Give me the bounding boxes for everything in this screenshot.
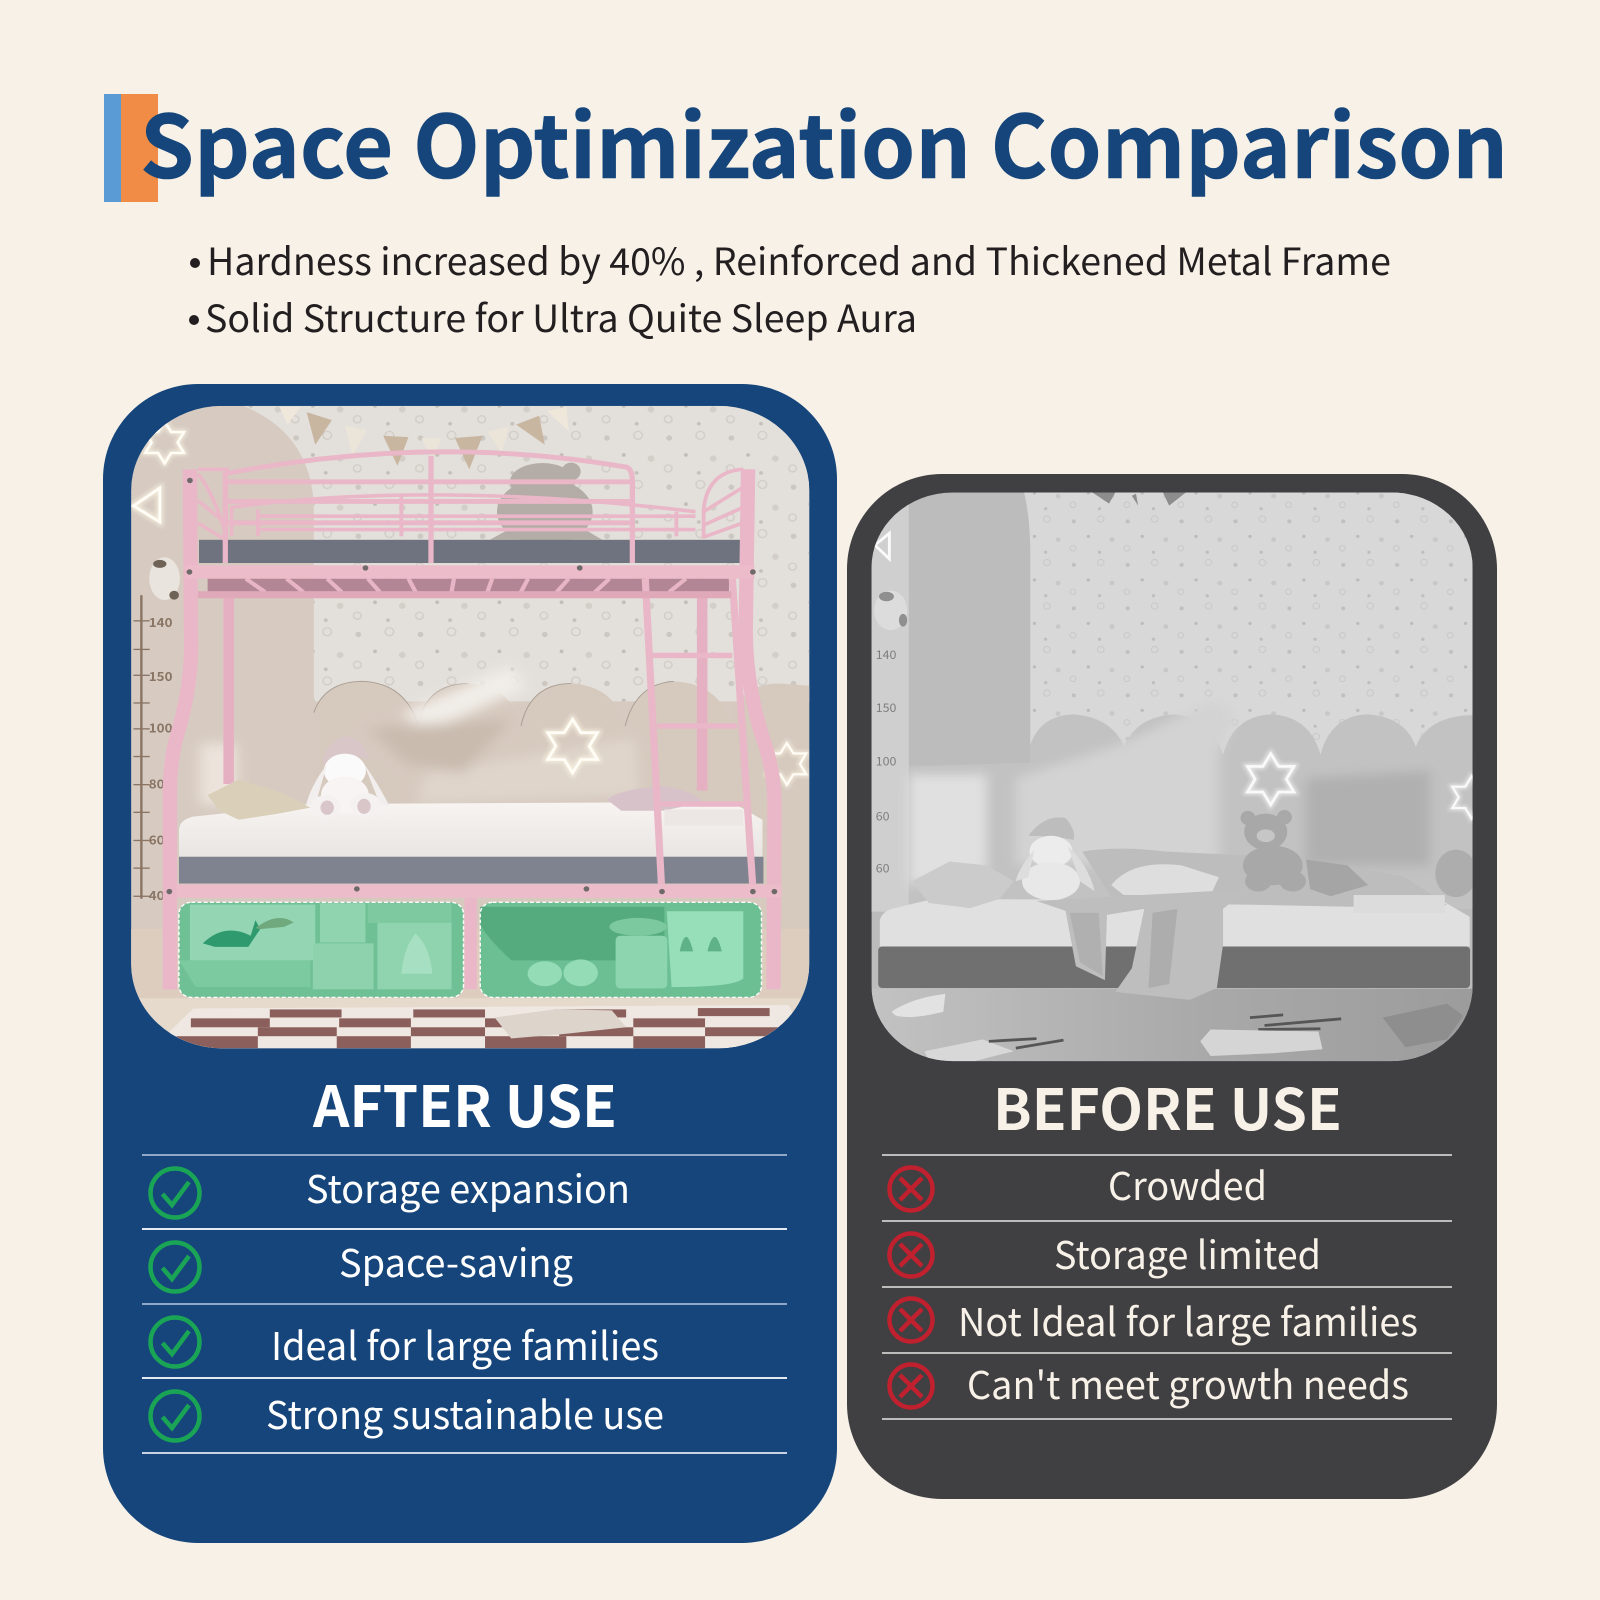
icon: orange accent bar: [121, 94, 158, 202]
pillows and rumpled bedding: [912, 849, 1447, 913]
scallops: [314, 681, 809, 934]
height ruler: 140: [149, 612, 173, 631]
height ruler: 150: [149, 666, 173, 685]
icon: check 1: [150, 1168, 200, 1218]
ruler labels: 150: [876, 699, 897, 716]
icon: cross 1: [890, 1168, 932, 1210]
storage highlight left: [179, 902, 464, 997]
ruler labels: 140: [876, 646, 897, 663]
bunny plush: [1016, 817, 1095, 900]
benefit rows: [142, 1155, 787, 1453]
storage highlight right: [480, 902, 761, 997]
panel: before use: [847, 474, 1497, 1499]
bullet text block: [189, 231, 1391, 343]
photo: pink bunk bed: [131, 406, 809, 1052]
row text: crowded: Crowded: [1108, 1156, 1267, 1212]
teddy bear: [1240, 810, 1306, 891]
glowing stars: [875, 533, 1491, 819]
drawback rows: [882, 1155, 1452, 1419]
scallops: [1030, 714, 1472, 754]
row text: storage limited: Storage limited: [1054, 1225, 1321, 1281]
panel: after use: [103, 384, 837, 1543]
ruler labels: 60: [876, 808, 890, 824]
checkered rug: [153, 1005, 809, 1048]
draped blanket: [1037, 891, 1228, 1000]
row text: not ideal for large families: Not Ideal for large families: [958, 1292, 1418, 1348]
panel background: [103, 384, 837, 1543]
lower mattress and pillows: [179, 780, 763, 884]
ruler labels: 60: [876, 860, 890, 876]
icon: cross 4: [890, 1364, 932, 1408]
bullet line 1: Hardness increased by 40% , Reinforced and Thickened Metal Frame: [207, 231, 1391, 286]
height ruler: 60: [149, 830, 165, 848]
icon: blue accent bar: [104, 94, 121, 202]
heading: after use: AFTER USE: [312, 1062, 617, 1144]
height ruler: 80: [149, 774, 165, 792]
height ruler: [133, 595, 173, 904]
title block: [104, 78, 1508, 204]
open book: [495, 1009, 626, 1038]
row text: space-saving: Space-saving: [339, 1233, 573, 1289]
icon: cross 2: [890, 1234, 932, 1276]
second bear on the right: [1435, 850, 1477, 897]
photo: mattress on the floor: [872, 493, 1491, 1064]
icon: cross 3: [890, 1298, 932, 1342]
heading: before use: BEFORE USE: [993, 1065, 1342, 1147]
panel background: [847, 474, 1497, 1499]
bullet line 2: Solid Structure for Ultra Quite Sleep Aura: [205, 288, 917, 343]
toy on the wall: [149, 557, 180, 600]
icon: check 4: [150, 1392, 200, 1440]
pink bed frame: [166, 452, 782, 989]
ruler labels: [876, 646, 897, 876]
rear posts: [223, 592, 707, 791]
bunting fragment: [1092, 493, 1186, 506]
row text: strong sustainable use: Strong sustainable use: [266, 1385, 664, 1441]
floor: [872, 989, 1473, 1064]
row text: storage expansion: Storage expansion: [306, 1159, 630, 1215]
title: Space Optimization Comparison: [140, 78, 1508, 204]
wall toy: [874, 591, 907, 630]
height ruler: 40: [149, 886, 165, 904]
bunting: [279, 407, 569, 469]
slats under top bunk: [208, 579, 729, 592]
icon: check 2: [150, 1242, 200, 1292]
glowing stars: [133, 422, 806, 785]
floor clutter: [891, 994, 1463, 1061]
white bunny plush: [306, 736, 389, 817]
ruler labels: 100: [876, 753, 897, 769]
mattress: [878, 899, 1470, 988]
grey plush on the top bunk: [490, 463, 602, 545]
dashed storage outlines: [179, 902, 761, 997]
icon: check 3: [150, 1318, 200, 1366]
height ruler: 100: [149, 718, 173, 737]
row text: can't meet growth needs: Can't meet growth needs: [967, 1355, 1409, 1411]
upper mattress: [199, 540, 741, 563]
row text: ideal for large families: Ideal for large families: [271, 1316, 659, 1372]
